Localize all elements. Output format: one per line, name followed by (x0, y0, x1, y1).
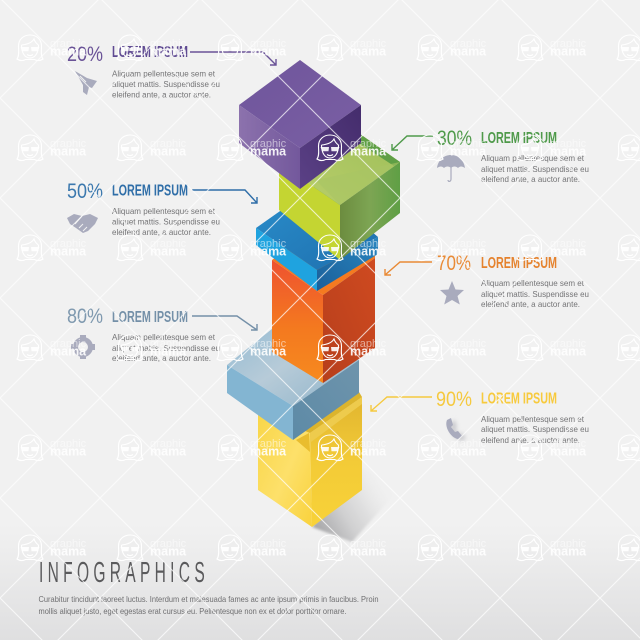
watermark: mama (550, 44, 587, 58)
callout: 50%: 50% (67, 180, 103, 203)
watermark: graphic (150, 338, 187, 350)
callout: 70%: LOREM IPSUM (481, 255, 557, 272)
watermark: graphic (450, 338, 487, 350)
cube: blue 50% (256, 185, 378, 291)
watermark (17, 35, 640, 561)
watermark: mama (450, 544, 487, 558)
watermark: graphic (350, 438, 387, 450)
arrow: 80% (192, 316, 257, 330)
stacked cubes (227, 60, 400, 527)
callout: 30%: LOREM IPSUM (481, 130, 557, 147)
watermark: graphic (150, 138, 187, 150)
watermark: mama (450, 344, 487, 358)
callout: 70% (385, 252, 589, 309)
watermark: mama (50, 244, 87, 258)
watermark: mama (350, 444, 387, 458)
watermark: graphic (450, 538, 487, 550)
watermark: graphic (50, 138, 87, 150)
icon: star (440, 281, 464, 304)
arrow: 90% (371, 397, 432, 411)
watermark: mama (150, 244, 187, 258)
watermark: mama (450, 44, 487, 58)
watermark: mama (250, 144, 287, 158)
footer text (38, 594, 379, 616)
watermark: graphic (550, 38, 587, 50)
watermark: mama (550, 344, 587, 358)
watermark: graphic (350, 138, 387, 150)
watermark: graphic (350, 38, 387, 50)
callout: 70%: eleifend ante, a auctor ante. (481, 299, 580, 309)
watermark: mama (550, 544, 587, 558)
watermark: mama (150, 44, 187, 58)
cube: purple 20% (239, 60, 361, 189)
callout: 20%: LOREM IPSUM (112, 44, 188, 61)
callout: 80%: aliquet mattis. Suspendisse eu (112, 343, 220, 353)
watermark: graphic (450, 38, 487, 50)
arrow: 50% (192, 190, 257, 203)
watermark: graphic (50, 238, 87, 250)
watermark: graphic (150, 238, 187, 250)
cube: green 30% (279, 120, 400, 260)
callout: 90%: eleifend ante, a auctor ante. (481, 435, 580, 445)
callout: 20%: aliquet mattis. Suspendisse eu (112, 79, 220, 89)
watermark: graphic (550, 538, 587, 550)
callout: 30%: eleifend ante, a auctor ante. (481, 174, 580, 184)
callout: 50%: LOREM IPSUM (112, 182, 188, 200)
callout: 20%: 20% (67, 43, 103, 66)
title: INFOGRAPHICS (39, 557, 209, 589)
callout: 50% (67, 180, 257, 237)
watermark: graphic (150, 38, 187, 50)
callout: 50%: eleifend ante, a auctor ante. (112, 227, 211, 237)
watermark: graphic (50, 38, 87, 50)
watermark: graphic (550, 138, 587, 150)
cube: orange 70% (272, 224, 375, 383)
watermark: mama (50, 44, 87, 58)
callout: 90% (371, 388, 589, 445)
watermark: mama (450, 244, 487, 258)
watermark: graphic (350, 538, 387, 550)
arrow: 20% (190, 52, 276, 65)
watermark: mama (350, 244, 387, 258)
watermark: graphic (50, 438, 87, 450)
watermark: graphic (350, 338, 387, 350)
watermark: mama (250, 44, 287, 58)
watermark: mama (350, 344, 387, 358)
watermark: graphic (350, 238, 387, 250)
cube: light blue 80% (227, 312, 359, 440)
icon: rocket (75, 71, 97, 95)
callout: 80% (67, 305, 257, 363)
watermark: mama (350, 44, 387, 58)
icon: umbrella (437, 155, 465, 181)
watermark: mama (350, 544, 387, 558)
callout: 30%: 30% (437, 127, 472, 150)
watermark: mama (250, 444, 287, 458)
icon: phone (446, 418, 466, 441)
watermark: graphic (150, 538, 187, 550)
footer text: Curabitur tincidunt laoreet luctus. Interdum et malesuada fames ac ante ipsum primis in faucibus. Proin (38, 594, 379, 604)
watermark: graphic (450, 238, 487, 250)
watermark: graphic (250, 338, 287, 350)
callout: 80%: Aliquam pellentesque sem et (112, 332, 216, 342)
callout: 70%: aliquet mattis. Suspendisse eu (481, 289, 589, 299)
cube: yellow 90% (258, 392, 362, 527)
callout: 90%: aliquet mattis. Suspendisse eu (481, 424, 589, 434)
watermark: mama (550, 144, 587, 158)
watermark: graphic (250, 138, 287, 150)
watermark: mama (50, 544, 87, 558)
watermark: graphic (150, 438, 187, 450)
watermark: graphic (550, 238, 587, 250)
watermark: graphic (250, 238, 287, 250)
callout: 30%: Aliquam pellentesque sem et (481, 153, 585, 163)
callout: 90%: LOREM IPSUM (481, 390, 557, 408)
watermark: mama (350, 144, 387, 158)
callout: 80%: 80% (67, 305, 103, 328)
callout: 90%: Aliquam pellentesque sem et (481, 414, 585, 424)
arrow: 70% (385, 262, 432, 275)
callout: 50%: aliquet mattis. Suspendisse eu (112, 216, 220, 226)
watermark: mama (150, 444, 187, 458)
watermark: graphic (50, 338, 87, 350)
shadow of the stack (312, 468, 402, 542)
watermark: graphic (50, 538, 87, 550)
callout: 80%: eleifend ante, a auctor ante. (112, 353, 211, 363)
watermark: graphic (550, 438, 587, 450)
callout: 70%: Aliquam pellentesque sem et (481, 278, 585, 288)
watermark: graphic (250, 38, 287, 50)
watermark: graphic (250, 538, 287, 550)
watermark: mama (150, 344, 187, 358)
callout: 80%: LOREM IPSUM (112, 309, 188, 326)
icon: gear (71, 335, 95, 359)
watermark: mama (250, 544, 287, 558)
watermark: mama (50, 144, 87, 158)
callout: 20% (67, 43, 276, 100)
callout: 70%: 70% (437, 252, 471, 275)
footer text: mollis aliquet justo, eget egestas erat cursus eu. Pellentesque non ex et dolor porttitor ornare. (38, 606, 346, 616)
watermark: graphic (250, 438, 287, 450)
watermark: mama (50, 344, 87, 358)
watermark: mama (150, 544, 187, 558)
arrow: 30% (392, 136, 433, 150)
watermark: graphic (450, 138, 487, 150)
callout: 20%: Aliquam pellentesque sem et (112, 68, 216, 78)
callout: 30%: aliquet mattis. Suspendisse eu (481, 164, 589, 174)
watermark: mama (50, 444, 87, 458)
watermark: mama (450, 444, 487, 458)
icon: handshake (67, 214, 98, 233)
watermark: mama (150, 144, 187, 158)
watermark: graphic (550, 338, 587, 350)
callout: 30% (392, 127, 589, 184)
watermark: mama (550, 444, 587, 458)
watermark: mama (250, 344, 287, 358)
callout: 50%: Aliquam pellentesque sem et (112, 206, 216, 216)
watermark: graphic (450, 438, 487, 450)
callout: 20%: eleifend ante, a auctor ante. (112, 90, 211, 100)
callout: 90%: 90% (436, 388, 472, 411)
watermark: mama (450, 144, 487, 158)
watermark: mama (550, 244, 587, 258)
watermark: mama (250, 244, 287, 258)
